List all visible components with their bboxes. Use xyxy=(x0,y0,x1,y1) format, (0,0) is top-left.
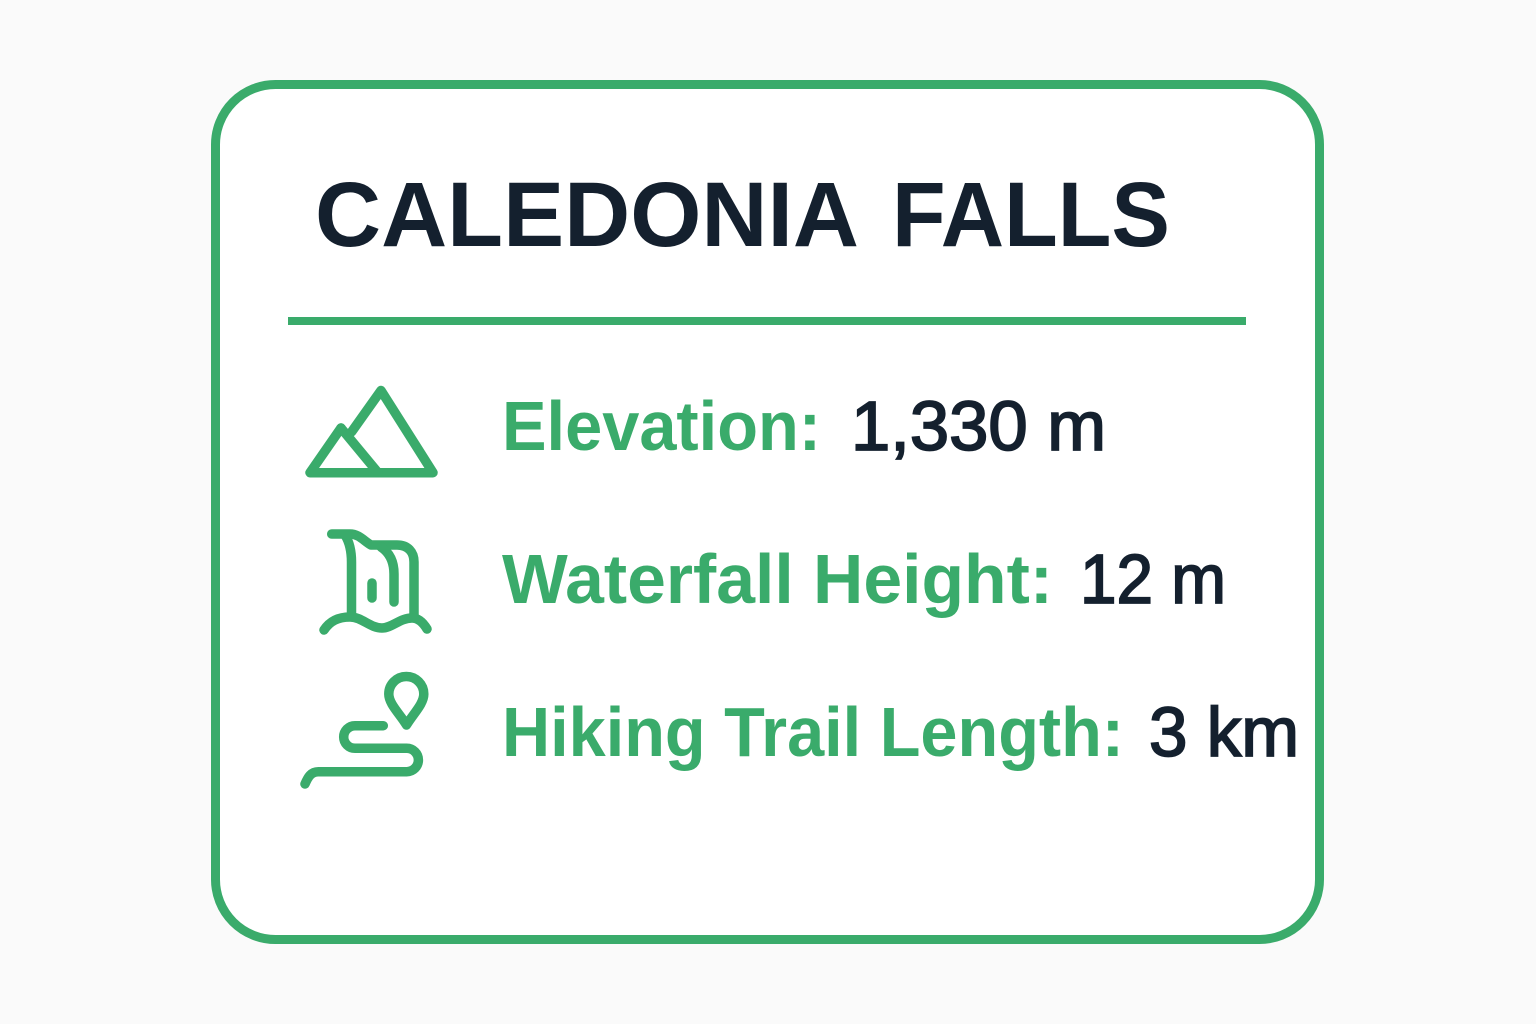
title: FALLS xyxy=(892,164,1170,266)
value: elevation: 1,330 m xyxy=(851,387,1106,465)
icon: waterfall xyxy=(324,534,427,630)
label: elevation: Elevation: xyxy=(502,387,821,465)
label: hiking trail length: Hiking Trail Length: xyxy=(502,693,1124,771)
panel: info card xyxy=(216,84,1320,940)
row: waterfall height xyxy=(324,534,1226,630)
divider under title xyxy=(288,317,1246,325)
value: hiking trail length: 3 km xyxy=(1149,693,1299,771)
title xyxy=(315,164,1170,266)
icon: mountains xyxy=(310,390,433,473)
label: waterfall height: Waterfall Height: xyxy=(502,540,1053,618)
value: waterfall height: 12 m xyxy=(1080,540,1226,618)
icon: trail with location pin xyxy=(305,676,424,784)
row: hiking trail length xyxy=(305,676,1299,784)
row: elevation xyxy=(310,387,1106,473)
title: CALEDONIA xyxy=(315,164,859,266)
